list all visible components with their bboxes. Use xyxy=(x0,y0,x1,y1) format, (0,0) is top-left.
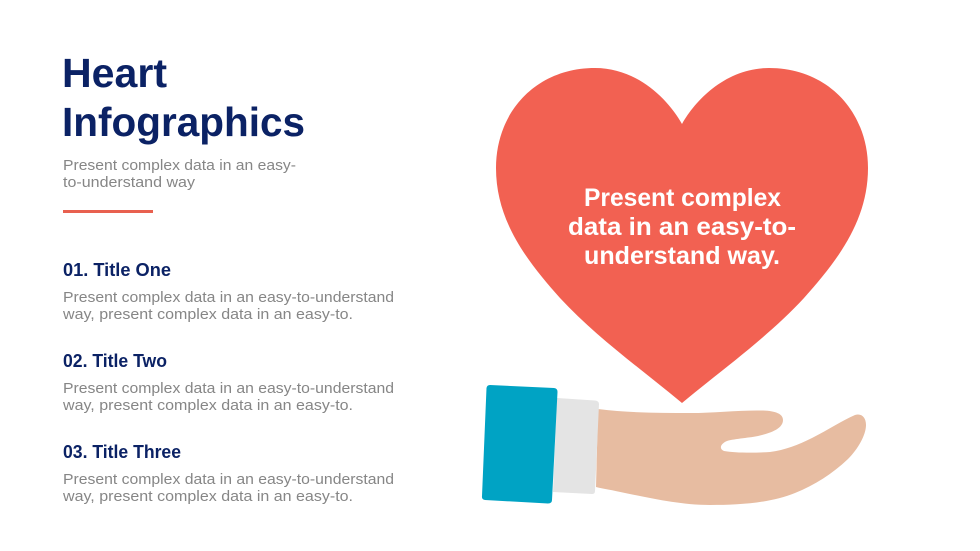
icon: heart xyxy=(496,68,868,403)
heart text: understand way. xyxy=(584,242,780,270)
subtitle: to-understand way xyxy=(63,174,196,191)
accent rule xyxy=(63,210,153,213)
title xyxy=(62,50,305,145)
title: Heart xyxy=(62,50,167,96)
item 3 xyxy=(62,442,394,505)
item 2: Present complex data in an easy-to-understand xyxy=(63,380,394,397)
item 1: way, present complex data in an easy-to. xyxy=(62,306,353,323)
subtitle: Present complex data in an easy- xyxy=(63,157,296,174)
item 1: Present complex data in an easy-to-understand xyxy=(63,289,394,306)
item 2 xyxy=(62,351,394,414)
item 2: way, present complex data in an easy-to. xyxy=(62,397,353,414)
shirt cuff xyxy=(553,398,599,494)
item 3: way, present complex data in an easy-to. xyxy=(62,488,353,505)
item 3: Present complex data in an easy-to-understand xyxy=(63,471,394,488)
item 3: 03. Title Three xyxy=(63,442,181,462)
title: Infographics xyxy=(62,99,305,145)
heart text: Present complex xyxy=(584,184,781,212)
item 1: 01. Title One xyxy=(63,260,171,280)
heart text xyxy=(568,184,796,270)
jacket sleeve xyxy=(482,385,558,504)
icon: hand xyxy=(482,385,866,505)
palm and fingers xyxy=(596,409,866,505)
heart text: data in an easy-to- xyxy=(568,213,796,241)
item 1 xyxy=(62,260,394,323)
subtitle xyxy=(63,157,296,191)
item 2: 02. Title Two xyxy=(63,351,167,371)
